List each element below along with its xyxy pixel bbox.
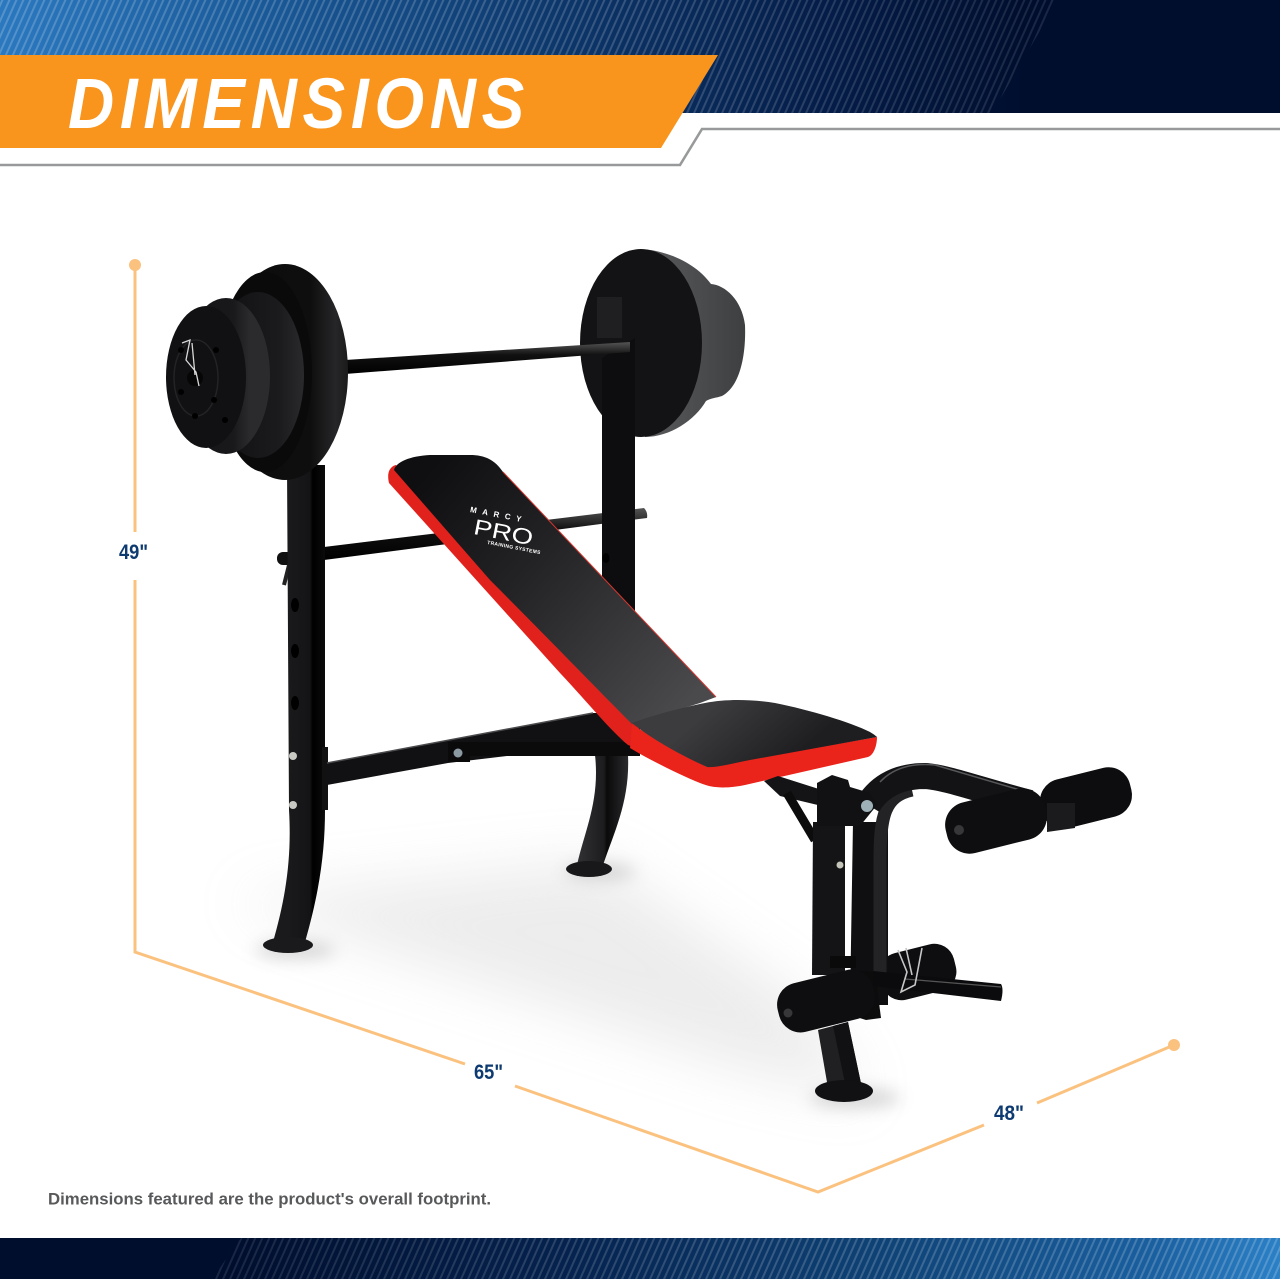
curved tube [880, 790, 912, 985]
curved arm [868, 776, 1030, 805]
axle [873, 971, 1002, 1001]
foot shadows [255, 864, 900, 1108]
footnote: Dimensions featured are the product's overall footprint. [48, 1190, 491, 1208]
label: length: 65" [474, 1061, 503, 1084]
right plate stack [580, 249, 745, 437]
label: height: 49" [119, 541, 148, 564]
seat support [764, 776, 822, 806]
title ribbon [0, 55, 718, 148]
spring clip [898, 948, 922, 992]
left upright [273, 465, 328, 942]
upper front pad [940, 783, 1052, 859]
right leg [577, 755, 628, 865]
lower leg [818, 1022, 862, 1088]
lower bracket [850, 970, 881, 1020]
width guide [1037, 1045, 1174, 1103]
header outline [0, 129, 1280, 165]
left plate stack [166, 264, 348, 480]
leg foot [815, 1080, 873, 1102]
lower front pad [772, 965, 880, 1037]
brace [787, 793, 815, 840]
top bracket [817, 775, 877, 826]
guide end dot: top [129, 259, 141, 271]
spring collar [182, 340, 199, 386]
right upright [602, 338, 635, 620]
dimension guides [135, 265, 1174, 1192]
hole in right upright [602, 553, 610, 563]
lower bar [277, 508, 647, 585]
brand logo: MARCY [469, 505, 523, 524]
frame crossbar [327, 713, 640, 785]
floor shadow [230, 860, 870, 1100]
seat pad [630, 700, 877, 787]
weight bench illustration [166, 249, 1137, 1108]
brand logo [464, 505, 547, 556]
rear post [850, 822, 888, 1005]
label: width: 48" [994, 1102, 1024, 1125]
barbell bar [345, 342, 630, 374]
lower rear pad [875, 940, 961, 1004]
guide end dot: right [1168, 1039, 1180, 1051]
bottom banner background [0, 1238, 1280, 1279]
left foot [263, 937, 313, 953]
roller connector [1047, 803, 1075, 832]
front post [812, 822, 845, 975]
pivot bolt [861, 800, 873, 812]
cross tube [830, 956, 856, 968]
length guide [515, 1086, 984, 1192]
brand logo: TRAINING SYSTEMS [487, 540, 541, 556]
leg attachment [764, 763, 1137, 1102]
right foot [566, 861, 612, 877]
top banner background [0, 0, 1280, 113]
height guide [135, 265, 465, 1064]
title: DIMENSIONS [68, 65, 524, 144]
bench back pad [388, 455, 716, 748]
brand logo: PRO [472, 514, 535, 550]
upper rear pad [1035, 763, 1137, 833]
